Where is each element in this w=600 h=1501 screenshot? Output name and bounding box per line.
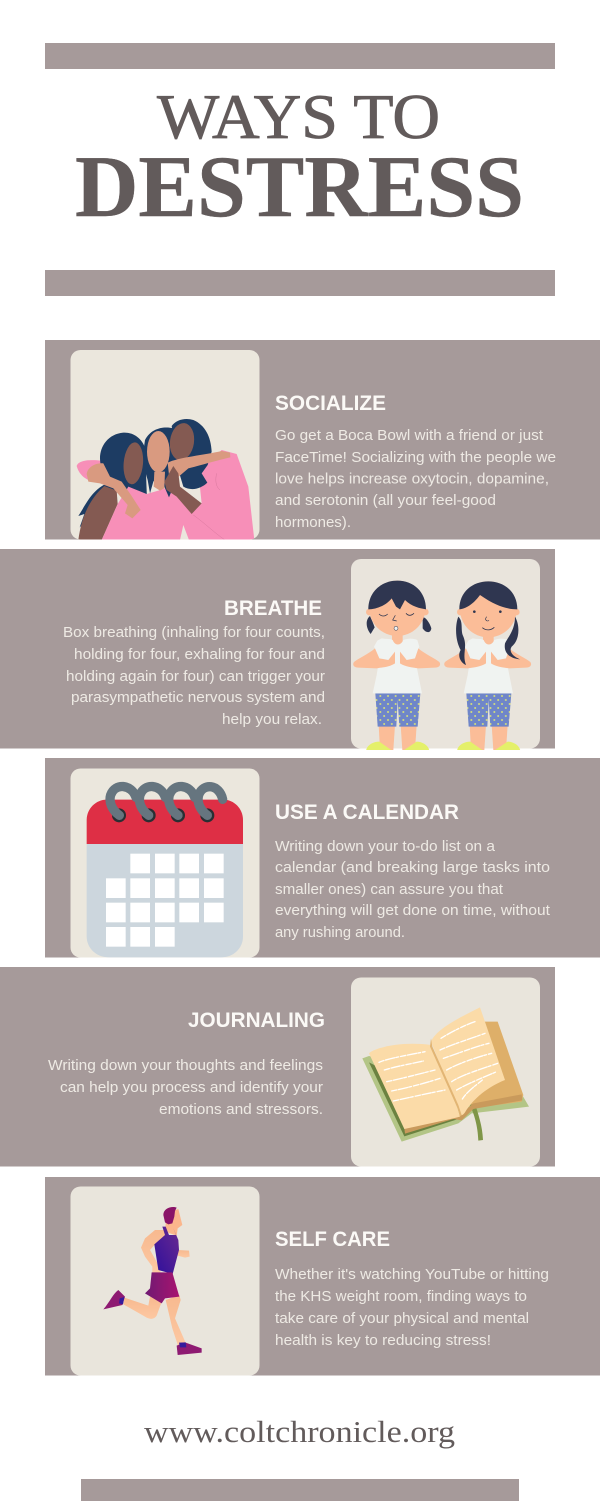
body text: Box breathing (inhaling for four counts, bbox=[63, 624, 325, 641]
body text: hormones). bbox=[275, 514, 351, 531]
body text: calendar (and breaking large tasks into bbox=[275, 859, 550, 876]
body text: emotions and stressors. bbox=[159, 1101, 323, 1118]
icon card: runner bbox=[70, 1186, 260, 1376]
body text: any rushing around. bbox=[275, 924, 405, 941]
footer bar bbox=[81, 1479, 519, 1501]
body text: FaceTime! Socializing with the people we bbox=[275, 449, 556, 466]
body text: everything will get done on time, without bbox=[275, 902, 551, 919]
body text bbox=[48, 1057, 323, 1118]
body text: the KHS weight room, finding ways to bbox=[275, 1288, 527, 1305]
body text: help you relax. bbox=[222, 711, 322, 728]
title: WAYS TO bbox=[157, 82, 440, 152]
panel: breathe bbox=[0, 549, 555, 751]
body text bbox=[275, 1266, 549, 1349]
panel: socialize bbox=[45, 340, 600, 540]
panel: journaling bbox=[0, 967, 555, 1166]
body text: smaller ones) can assure you that bbox=[275, 881, 504, 898]
title: DESTRESS bbox=[75, 139, 524, 236]
body text bbox=[275, 427, 556, 531]
title bbox=[75, 82, 524, 236]
body text: parasympathetic nervous system and bbox=[71, 689, 325, 706]
icon card: open book bbox=[351, 978, 540, 1166]
body text bbox=[63, 624, 325, 728]
body text: Writing down your to-do list on a bbox=[275, 838, 496, 855]
body text: Writing down your thoughts and feelings bbox=[48, 1057, 323, 1074]
footer url: www.coltchronicle.org bbox=[144, 1414, 455, 1449]
heading: BREATHE bbox=[224, 597, 322, 620]
body text: can help you process and identify your bbox=[60, 1079, 323, 1096]
body text: Whether it's watching YouTube or hitting bbox=[275, 1266, 549, 1283]
top bar bbox=[45, 43, 555, 69]
heading: SOCIALIZE bbox=[275, 392, 386, 415]
body text: health is key to reducing stress! bbox=[275, 1332, 491, 1349]
icon card: two girls breathing bbox=[351, 559, 540, 751]
icon card: three friends hugging bbox=[70, 350, 260, 540]
heading: USE A CALENDAR bbox=[275, 801, 459, 824]
body text bbox=[275, 838, 551, 941]
body text: holding for four, exhaling for four and bbox=[74, 646, 325, 663]
body text: and serotonin (all your feel-good bbox=[275, 492, 496, 509]
body text: holding again for four) can trigger your bbox=[66, 668, 325, 685]
body text: love helps increase oxytocin, dopamine, bbox=[275, 470, 549, 488]
body text: take care of your physical and mental bbox=[275, 1310, 529, 1327]
body text: Go get a Boca Bowl with a friend or just bbox=[275, 427, 544, 444]
panel: use a calendar bbox=[45, 758, 600, 958]
panel: self care bbox=[45, 1177, 600, 1376]
heading: JOURNALING bbox=[188, 1009, 325, 1032]
lower title bar bbox=[45, 270, 555, 296]
heading: SELF CARE bbox=[275, 1228, 390, 1251]
icon card: calendar bbox=[70, 768, 260, 958]
